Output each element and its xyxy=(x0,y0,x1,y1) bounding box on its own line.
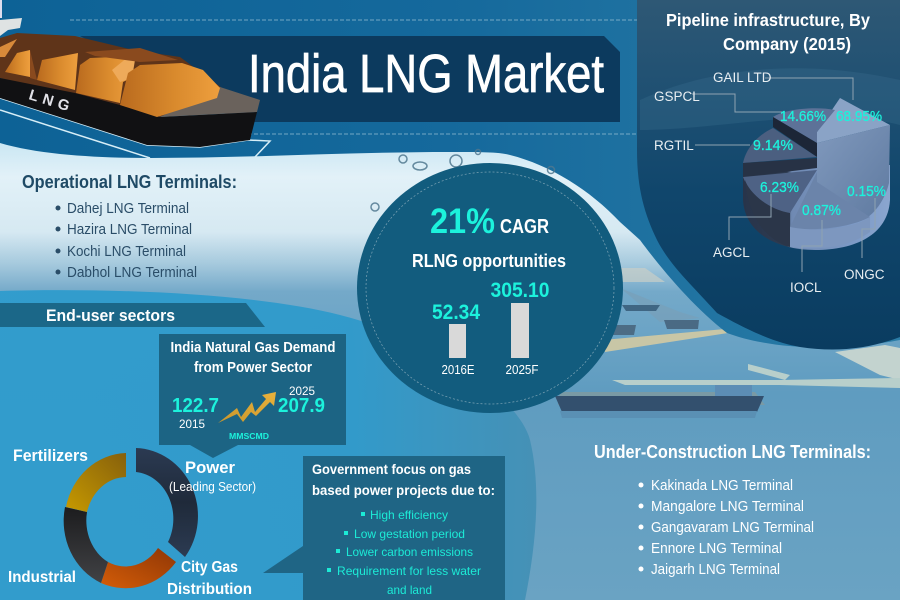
heading: operational: Operational LNG Terminals: xyxy=(22,172,237,192)
list: reasons: and land xyxy=(387,583,432,597)
donut chart xyxy=(64,448,198,588)
chart labels: GSPCL xyxy=(654,89,700,104)
icon: rising arrow xyxy=(218,392,276,423)
callout: government focus xyxy=(263,456,505,600)
callout: government focus: Government focus on gas xyxy=(312,461,471,477)
list: under-construction terminals: Jaigarh LNG Terminal xyxy=(651,562,780,578)
stat: 2025: 207.9 xyxy=(278,395,325,417)
donut labels xyxy=(8,446,256,598)
chart percentages: 68.95% xyxy=(836,108,882,125)
heading: pipeline: Pipeline infrastructure, By xyxy=(666,10,870,30)
chart labels: IOCL xyxy=(790,280,822,295)
callout: government focus: based power projects due to: xyxy=(312,482,495,498)
stat: CAGR: CAGR xyxy=(500,216,549,238)
chart labels: ONGC xyxy=(844,267,885,282)
list: under-construction terminals: Kakinada LNG Terminal xyxy=(651,478,793,494)
callout: power demand: 2015 xyxy=(179,417,205,431)
heading: under-construction: Under-Construction LNG Terminals: xyxy=(594,442,871,462)
chart labels: RGTIL xyxy=(654,138,694,153)
pie chart xyxy=(743,98,890,250)
donut labels: City Gas xyxy=(181,559,238,576)
leader lines xyxy=(692,78,875,272)
stat: 21%: 21% xyxy=(430,202,495,241)
list: reasons: Lower carbon emissions xyxy=(346,545,473,559)
icon: LNG tanker ship: LNG xyxy=(27,87,76,116)
bubbles xyxy=(371,150,554,211)
bar chart: 2016E xyxy=(442,362,475,377)
list: under-construction terminals: Gangavaram LNG Terminal xyxy=(651,520,814,536)
list: operational terminals: Dahej LNG Terminal xyxy=(67,201,189,217)
list: reasons: Requirement for less water xyxy=(337,564,481,578)
operational terminals xyxy=(22,172,237,281)
callout: power demand: 2025 xyxy=(289,384,315,398)
donut labels: Power xyxy=(185,458,235,477)
banner: end-user sectors xyxy=(0,303,265,327)
chart labels: GAIL LTD xyxy=(713,70,772,85)
icon: LNG tanker ship xyxy=(0,0,270,158)
list: under-construction terminals xyxy=(638,478,814,578)
chart percentages: 6.23% xyxy=(760,179,799,196)
bar chart: 2025F xyxy=(506,362,539,377)
donut labels: (Leading Sector) xyxy=(169,479,256,494)
callout: power demand: India Natural Gas Demand xyxy=(170,340,336,356)
chart labels: AGCL xyxy=(713,245,750,260)
chart labels xyxy=(654,70,885,295)
list: operational terminals: Dabhol LNG Terminal xyxy=(67,265,197,281)
chart percentages xyxy=(753,108,886,219)
subheading: RLNG opportunities xyxy=(412,251,566,271)
donut labels: Fertilizers xyxy=(13,446,88,465)
list: under-construction terminals: Ennore LNG Terminal xyxy=(651,541,782,557)
callout: power demand xyxy=(159,334,346,458)
banner: end-user sectors: End-user sectors xyxy=(46,306,175,325)
title banner: India LNG Market xyxy=(248,44,604,104)
list: under-construction terminals: Mangalore LNG Terminal xyxy=(651,499,804,515)
chart percentages: 14.66% xyxy=(780,108,826,125)
panel: pipeline infrastructure xyxy=(637,0,900,350)
chart percentages: 9.14% xyxy=(753,137,793,154)
bar chart xyxy=(432,279,550,377)
list: reasons: Low gestation period xyxy=(354,527,465,541)
list: operational terminals xyxy=(56,201,197,281)
heading: pipeline line 2: Company (2015) xyxy=(723,34,851,54)
chart percentages: 0.15% xyxy=(847,183,886,200)
list: operational terminals: Hazira LNG Terminal xyxy=(67,222,192,238)
bar chart: 52.34 xyxy=(432,301,480,324)
list: reasons xyxy=(327,508,481,597)
callout: power demand: MMSCMD xyxy=(229,432,269,441)
list: reasons: High efficiency xyxy=(370,508,448,522)
chart percentages: 0.87% xyxy=(802,202,841,219)
donut labels: Industrial xyxy=(8,569,76,586)
bar chart: 305.10 xyxy=(490,279,550,302)
title banner xyxy=(80,36,620,122)
stat: 2015: 122.7 xyxy=(172,395,219,417)
callout: power demand: from Power Sector xyxy=(194,360,312,376)
circle: CAGR xyxy=(357,163,623,413)
under-construction terminals xyxy=(594,442,871,578)
list: operational terminals: Kochi LNG Terminal xyxy=(67,244,186,260)
donut labels: Distribution xyxy=(167,581,252,598)
